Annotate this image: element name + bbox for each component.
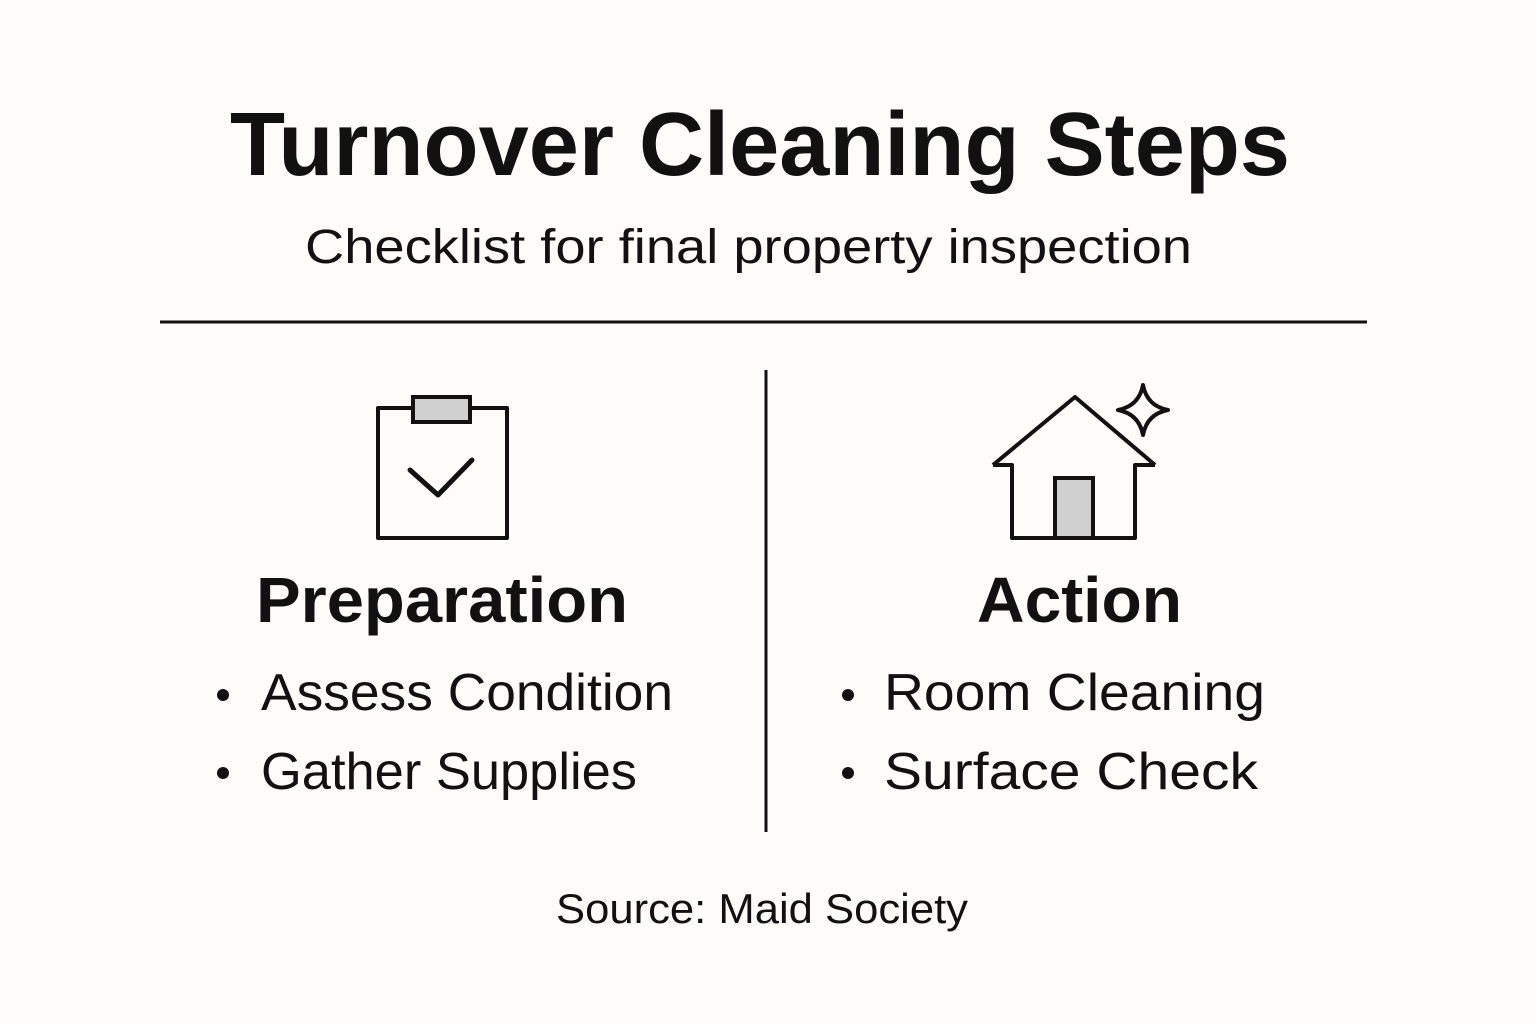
title: Turnover Cleaning Steps xyxy=(230,95,1290,195)
list: action items xyxy=(842,664,1265,801)
list: action items: Room Cleaning xyxy=(884,664,1265,722)
icon: house with sparkle xyxy=(993,385,1168,538)
list: preparation items: Assess Condition xyxy=(261,664,673,722)
icon: clipboard xyxy=(378,397,507,538)
list: preparation items: Gather Supplies xyxy=(261,743,637,801)
source note: Source: Maid Society xyxy=(556,885,968,932)
subtitle: Checklist for final property inspection xyxy=(305,221,1192,274)
panel: action xyxy=(842,385,1265,801)
list: preparation items xyxy=(217,664,673,801)
panel: preparation xyxy=(217,397,673,801)
list: action items: Surface Check xyxy=(884,743,1259,801)
heading: action: Action xyxy=(977,564,1182,636)
heading: preparation: Preparation xyxy=(256,564,628,636)
